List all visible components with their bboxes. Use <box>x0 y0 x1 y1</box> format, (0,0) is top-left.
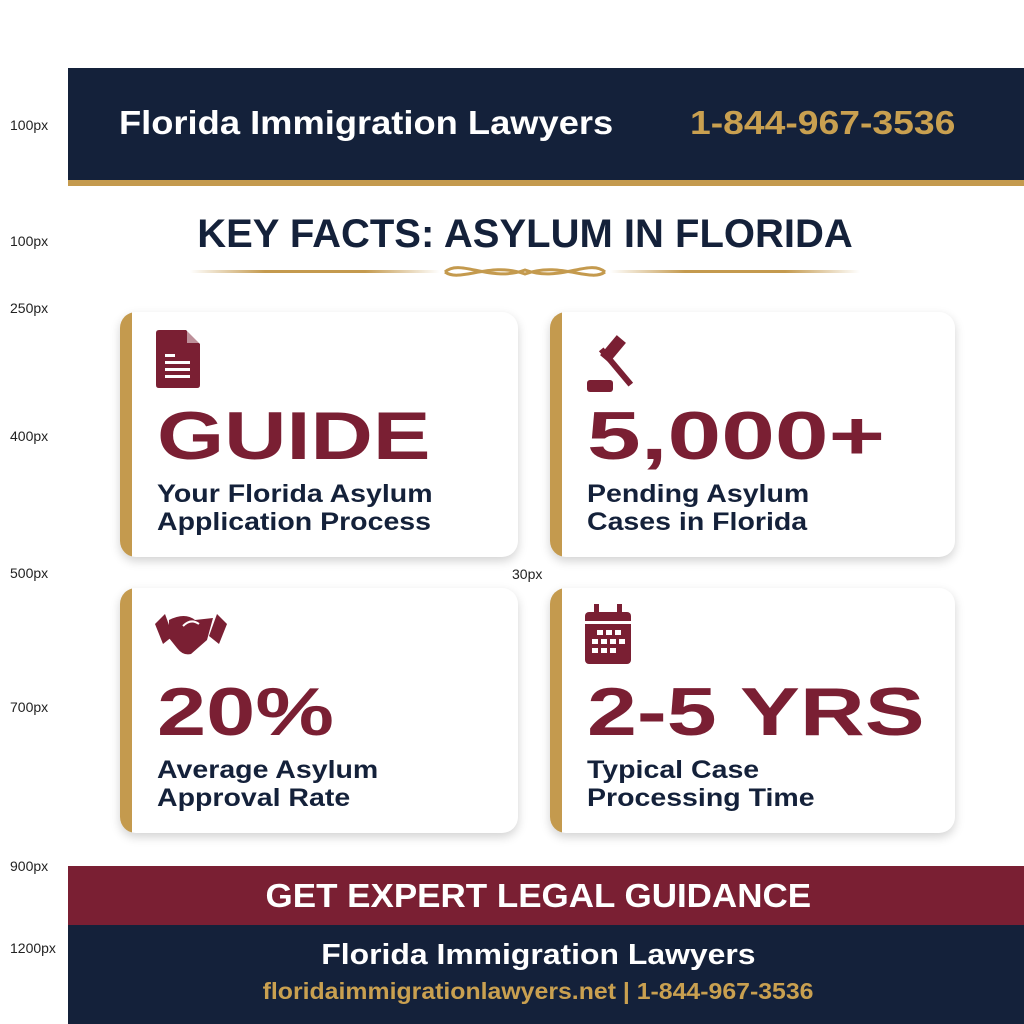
cta banner: GET EXPERT LEGAL GUIDANCE <box>265 877 811 914</box>
card: processing time: Typical Case <box>587 756 759 784</box>
header bar: Florida Immigration Lawyers <box>119 104 613 141</box>
card: pending cases: 5,000+ <box>587 398 885 474</box>
side labels: 500px <box>10 565 48 581</box>
side labels: 1200px <box>10 940 56 956</box>
card: guide: Your Florida Asylum <box>157 480 433 508</box>
gap label: 30px <box>512 566 542 582</box>
card: pending cases: Cases in Florida <box>587 508 807 536</box>
side labels: 250px <box>10 300 48 316</box>
footer: Florida Immigration Lawyers <box>321 939 755 971</box>
card: guide <box>120 312 518 557</box>
side labels: 700px <box>10 699 48 715</box>
card: processing time: 2-5 YRS <box>587 674 925 750</box>
ornament divider <box>194 266 856 277</box>
icon: document <box>156 330 200 388</box>
title: KEY FACTS: ASYLUM IN FLORIDA <box>197 212 853 256</box>
card: approval rate: 20% <box>157 674 334 750</box>
side labels: 900px <box>10 858 48 874</box>
footer: floridaimmigrationlawyers.net | 1-844-967-3536 <box>263 978 813 1004</box>
card: approval rate <box>120 588 518 833</box>
header bar <box>68 68 1024 186</box>
card: processing time <box>550 588 955 833</box>
card: pending cases <box>550 312 955 557</box>
side labels: 400px <box>10 428 48 444</box>
footer <box>68 925 1024 1024</box>
card: guide: GUIDE <box>157 398 431 474</box>
header bar: 1-844-967-3536 <box>690 104 955 141</box>
icon: handshake <box>155 614 227 654</box>
card: guide: Application Process <box>157 508 431 536</box>
card: processing time: Processing Time <box>587 784 815 812</box>
side labels: 100px <box>10 233 48 249</box>
side labels <box>10 117 56 956</box>
side labels: 100px <box>10 117 48 133</box>
cta banner <box>68 866 1024 925</box>
card: approval rate: Approval Rate <box>157 784 350 812</box>
icon: calendar <box>585 604 631 664</box>
card: approval rate: Average Asylum <box>157 756 378 784</box>
icon: gavel <box>587 335 633 392</box>
card: pending cases: Pending Asylum <box>587 480 809 508</box>
